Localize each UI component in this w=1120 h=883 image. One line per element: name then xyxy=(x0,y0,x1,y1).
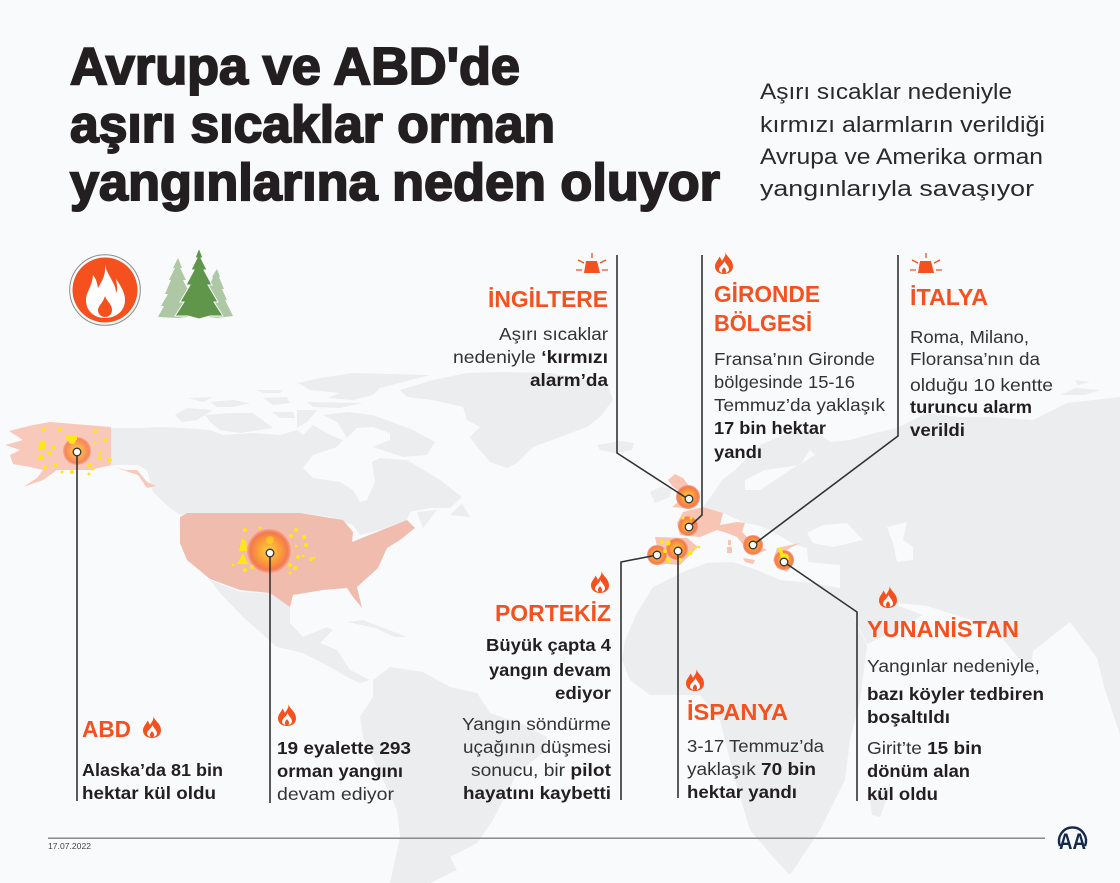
text: Yunanistan details: dönüm alan xyxy=(867,761,970,781)
text: Portekiz details: Büyük çapta 4 xyxy=(486,635,611,655)
text: İtalya details: Roma, Milano, xyxy=(910,327,1029,347)
text: İngiltere details xyxy=(453,324,608,390)
intro text xyxy=(760,79,1045,201)
text: states details xyxy=(277,738,411,804)
icon: alarm xyxy=(910,253,942,273)
Europe regions xyxy=(648,474,800,572)
text: İngiltere details: Aşırı sıcaklar xyxy=(499,324,608,344)
text: Portekiz details: Yangın söndürme xyxy=(462,714,611,734)
title: aşırı sıcaklar orman xyxy=(70,96,555,154)
panel: İngiltere xyxy=(453,253,608,390)
panel: Yunanistan xyxy=(867,586,1044,804)
text: Gironde details: bölgesinde 15-16 xyxy=(714,372,855,392)
panel: İspanya xyxy=(686,668,824,802)
leader lines and location dots xyxy=(73,255,898,803)
heading: Yunanistan: YUNANİSTAN xyxy=(867,616,1019,642)
footer rule xyxy=(48,838,1045,839)
heading: İtalya: İTALYA xyxy=(910,284,988,310)
text: İngiltere details: alarm’da xyxy=(530,370,608,390)
text: Portekiz details xyxy=(462,635,611,803)
text: Alaska details: Alaska’da 81 bin xyxy=(82,760,223,780)
text: Yunanistan details: boşaltıldı xyxy=(867,707,950,727)
heading: İngiltere: İNGİLTERE xyxy=(488,286,608,312)
logo: AA: AA xyxy=(1059,829,1086,854)
text: İspanya details: yaklaşık 70 bin xyxy=(687,759,816,779)
text: İspanya details: 3-17 Temmuz’da xyxy=(687,736,824,756)
yellow fire spots xyxy=(37,428,789,574)
panel: İtalya xyxy=(910,253,1053,440)
icon: flame xyxy=(143,716,161,738)
text: Yunanistan details: bazı köyler tedbiren xyxy=(867,684,1044,704)
heading: Gironde Bölgesi: BÖLGESİ xyxy=(714,310,812,336)
text: Gironde details: Fransa’nın Gironde xyxy=(714,349,875,369)
heading: İspanya: İSPANYA xyxy=(687,699,788,725)
intro text: yangınlarıyla savaşıyor xyxy=(760,176,1034,201)
text: İspanya details: hektar yandı xyxy=(687,782,797,802)
highlighted regions xyxy=(5,422,800,608)
heading: Gironde Bölgesi xyxy=(714,281,820,336)
contiguous USA xyxy=(180,513,415,608)
text: states details: orman yangını xyxy=(277,761,403,781)
intro text: Aşırı sıcaklar nedeniyle xyxy=(760,79,1012,104)
icon: alarm xyxy=(576,253,608,273)
text: İngiltere details: nedeniyle ‘kırmızı xyxy=(453,347,608,367)
heading: Gironde Bölgesi: GİRONDE xyxy=(714,281,820,307)
title xyxy=(70,38,720,212)
text: İtalya details: verildi xyxy=(910,420,965,440)
text: Yunanistan details: Yangınlar nedeniyle, xyxy=(867,656,1040,676)
text: states details: devam ediyor xyxy=(277,784,394,804)
text: Yunanistan details xyxy=(867,656,1044,804)
fire hotspots xyxy=(37,428,794,574)
text: İspanya details xyxy=(687,736,824,802)
text: Gironde details: 17 bin hektar xyxy=(714,418,826,438)
icon: pine trees xyxy=(158,248,233,319)
text: Yunanistan details: Girit’te 15 bin xyxy=(867,738,982,758)
text: Alaska details xyxy=(82,760,223,803)
icon: flame xyxy=(686,668,704,691)
text: İtalya details: turuncu alarm xyxy=(910,397,1032,417)
icon: flame xyxy=(591,570,609,593)
icon: flame xyxy=(879,586,897,608)
text: İtalya details xyxy=(910,327,1053,440)
text: İtalya details: Floransa’nın da xyxy=(910,349,1040,369)
heading: Portekiz: PORTEKİZ xyxy=(495,600,611,626)
text: Gironde details: Temmuz’da yaklaşık xyxy=(714,395,885,415)
title: Avrupa ve ABD'de xyxy=(70,38,520,96)
panel: Portekiz xyxy=(462,570,611,803)
text: Alaska details: hektar kül oldu xyxy=(82,783,216,803)
text: İtalya details: olduğu 10 kentte xyxy=(910,375,1053,395)
text: states details: 19 eyalette 293 xyxy=(277,738,411,758)
text: Portekiz details: uçağının düşmesi xyxy=(463,737,611,757)
intro text: Avrupa ve Amerika orman xyxy=(760,144,1043,169)
grey continents xyxy=(111,372,1120,883)
text: Yunanistan details: kül oldu xyxy=(867,784,938,804)
panel: Gironde xyxy=(714,252,885,462)
world map xyxy=(5,372,1120,883)
text: Gironde details: yandı xyxy=(714,442,762,462)
text: Gironde details xyxy=(714,349,885,462)
title: yangınlarına neden oluyor xyxy=(70,154,720,212)
text: Portekiz details: hayatını kaybetti xyxy=(463,783,611,803)
date: 17.07.2022 xyxy=(48,841,91,851)
icon: flame xyxy=(715,252,733,274)
heading: ABD: ABD xyxy=(82,716,131,742)
icon: flame xyxy=(278,704,296,726)
text: Portekiz details: sonucu, bir pilot xyxy=(471,760,611,780)
text: Portekiz details: ediyor xyxy=(555,683,611,703)
text: Portekiz details: yangın devam xyxy=(489,660,611,680)
panel: ABD eyaletler xyxy=(277,704,411,804)
intro text: kırmızı alarmların verildiği xyxy=(760,112,1045,137)
Alaska xyxy=(5,422,156,488)
panel: ABD Alaska xyxy=(82,716,223,803)
icon: fire badge xyxy=(70,255,140,325)
